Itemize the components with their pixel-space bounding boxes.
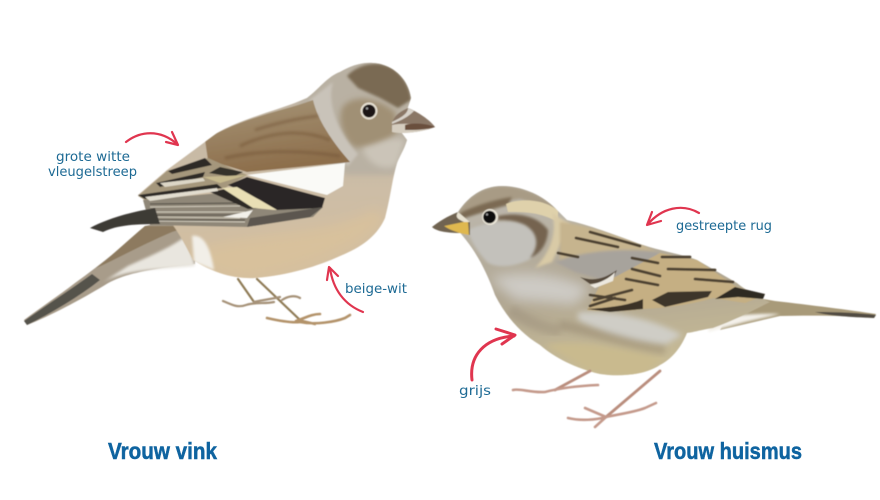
- beak: [392, 108, 435, 133]
- beak: [432, 212, 470, 235]
- bird: vrouw vink: [24, 60, 435, 325]
- back: [560, 222, 652, 260]
- label: beige-wit: beige-wit: [345, 282, 407, 297]
- title: vrouw vink: Vrouw vink: [108, 438, 217, 464]
- label: grote witte vleugelstreep: [48, 150, 137, 180]
- wing: [90, 158, 345, 232]
- back: [205, 100, 350, 172]
- arrow: gestreepte rug: [647, 208, 699, 225]
- arrow: beige-wit: [327, 267, 363, 312]
- bird: vrouw huismus: [432, 186, 876, 427]
- head cap: [458, 186, 558, 216]
- title: vrouw huismus: Vrouw huismus: [654, 438, 802, 464]
- arrow: grote witte vleugelstreep: [126, 132, 178, 145]
- eye: [360, 102, 378, 120]
- head shading: [300, 60, 415, 175]
- legs: [223, 279, 350, 324]
- wing stripes: [558, 232, 765, 312]
- body: [458, 186, 770, 375]
- arrow: grijs: [472, 329, 515, 380]
- label: grote witte vleugelstreep: grote witte: [56, 150, 130, 165]
- eye: [482, 209, 498, 225]
- legs: [513, 371, 660, 427]
- wing upper base: [138, 158, 247, 201]
- body: [138, 63, 411, 278]
- label: grote witte vleugelstreep: vleugelstreep: [48, 165, 137, 180]
- breast and flank: [490, 273, 682, 378]
- primaries: [143, 193, 323, 227]
- label: grijs: grijs: [459, 384, 491, 399]
- dark wing bands: [168, 158, 212, 174]
- belly warm: [190, 210, 385, 278]
- tail: [24, 223, 195, 325]
- tail: [720, 295, 876, 330]
- label: gestreepte rug: gestreepte rug: [676, 219, 772, 234]
